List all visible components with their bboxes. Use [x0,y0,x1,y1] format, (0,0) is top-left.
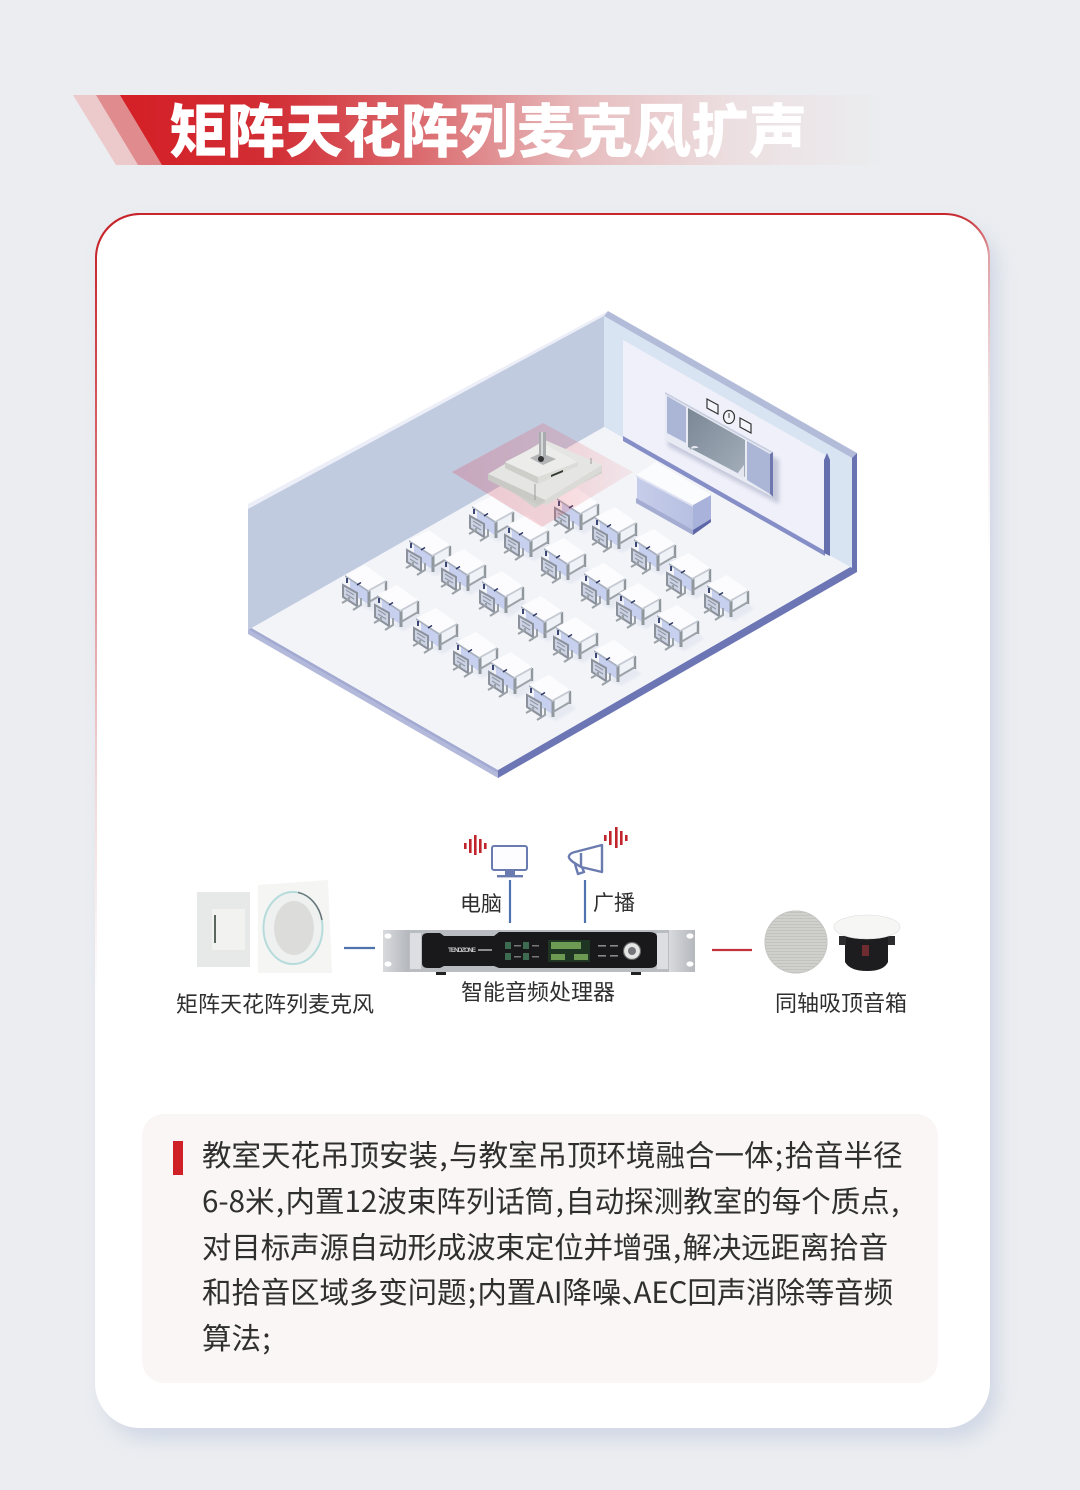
speaker grille [764,910,828,974]
red marker bar [173,1141,183,1175]
description text: 和拾音区域多变问题;内置AI降噪、AEC回声消除等音频 [202,1270,893,1312]
audio processor [383,930,695,975]
blackboard [665,392,779,504]
left wall [248,315,604,630]
system diagram [176,827,907,1019]
icon: computer monitor [492,846,527,877]
title: 矩阵天花阵列麦克风扩声 [169,85,807,169]
ceiling microphone with red pickup zone [452,423,633,527]
ceiling speaker [834,915,900,971]
label: microphone: 矩阵天花阵列麦克风 [176,987,374,1019]
description text: 算法; [202,1316,271,1358]
audio processor: TENDZONE [448,947,477,954]
ribbon: pale [73,95,400,165]
icon: megaphone [569,845,602,874]
connector: microphone to processor [344,947,375,949]
front wall panel [623,340,830,556]
title banner [73,85,885,169]
connector: broadcast [584,880,586,923]
description text: 教室天花吊顶安装,与教室吊顶环境融合一体;拾音半径 [202,1133,903,1175]
description panel [142,1114,938,1383]
label: computer: 电脑 [460,888,502,918]
connector: computer [509,880,511,923]
main card [96,214,998,1440]
ribbon: medium [96,95,400,165]
description text: 对目标声源自动形成波束定位并增强,解决远距离拾音 [202,1225,888,1267]
label: speakers: 同轴吸顶音箱 [775,986,907,1018]
classroom isometric illustration [248,311,857,778]
left wall top edge [248,311,608,509]
ceiling array microphone product [197,880,332,973]
wall pictures and clock [707,399,751,433]
right wall end edge [852,453,857,572]
description text: 6-8米,内置12波束阵列话筒,自动探测教室的每个质点, [202,1179,899,1221]
teacher podium [636,462,711,535]
floor edge [248,563,857,778]
ribbon: red gradient [120,95,885,165]
right wall [604,316,852,568]
icon: sound wave right [604,827,628,848]
icon: sound wave left [464,835,487,855]
description text [202,1133,903,1358]
label: broadcast: 广播 [593,887,635,917]
connector: processor to speakers [712,949,752,951]
label: processor: 智能音频处理器 [461,975,615,1007]
floor [248,427,852,770]
student desks [342,488,754,721]
right wall top edge [604,311,857,458]
